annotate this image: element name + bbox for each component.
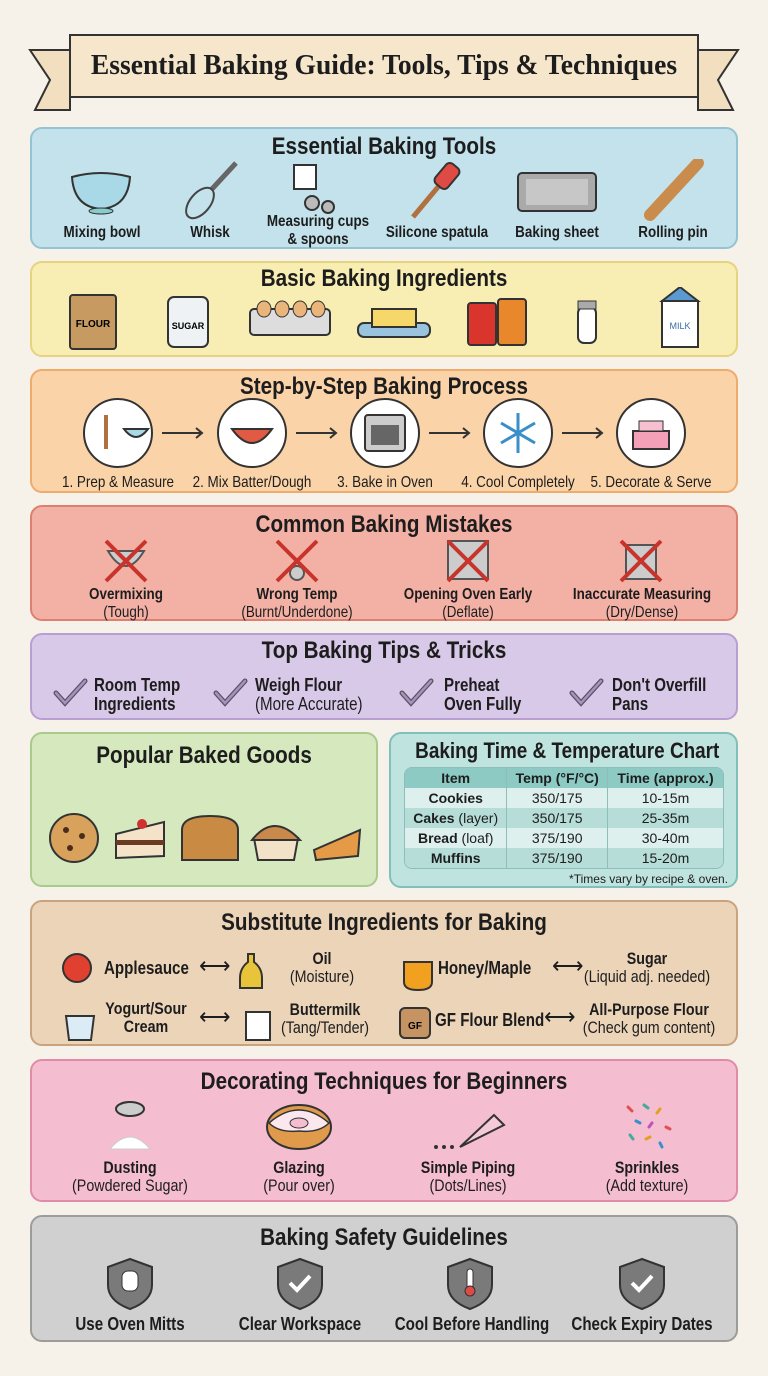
- panel: tips: Oven Fully: [444, 694, 521, 714]
- panel: substitutes: Oil: [312, 949, 332, 968]
- panel: mistakes: (Deflate): [442, 604, 494, 621]
- panel: mistakes: (Dry/Dense): [606, 604, 678, 621]
- panel: process: [30, 369, 738, 493]
- panel: substitutes: [30, 900, 738, 1046]
- icons: substitutes: [62, 953, 433, 1041]
- labels: process: 1. Prep & Measure: [62, 474, 174, 491]
- panel: substitutes: (Tang/Tender): [281, 1018, 369, 1037]
- panel: substitutes: ⟷: [199, 1004, 231, 1029]
- panel: process: 3. Bake in Oven: [337, 474, 433, 491]
- icons: crossed mistakes: [104, 540, 662, 582]
- icons: shields: [107, 1258, 665, 1310]
- icons: ingredients: [69, 287, 701, 350]
- panel: mistakes: Wrong Temp: [257, 586, 337, 603]
- icon: whisk: [185, 161, 238, 220]
- icon: bowl: [70, 172, 132, 214]
- panel: mistakes: (Burnt/Underdone): [241, 604, 353, 621]
- icon: baking sheet: [517, 172, 597, 212]
- heading: tools: Essential Baking Tools: [272, 133, 496, 160]
- table: baking times: [404, 767, 724, 869]
- tip texts: Ingredients: [94, 694, 175, 714]
- heading: substitutes: Substitute Ingredients for Baking: [221, 909, 547, 936]
- labels: decorating: (Powdered Sugar): [72, 1176, 188, 1195]
- panel: substitutes: GF Flour Blend: [435, 1010, 544, 1030]
- panel: tools: Measuring cups: [267, 213, 369, 230]
- heading: chart: Baking Time & Temperature Chart: [415, 738, 719, 763]
- panel: popular baked goods: [30, 732, 378, 887]
- icons: ingredients: MILK: [669, 321, 691, 331]
- table: baking times: 30-40m: [642, 830, 689, 846]
- panel: substitutes: ⟷: [544, 1004, 576, 1029]
- panel: tools: & spoons: [287, 231, 349, 248]
- panel: tips: [30, 633, 738, 720]
- icons: ingredients: FLOUR: [76, 319, 111, 330]
- table: baking times: Item: [441, 770, 470, 786]
- panel: substitutes: Yogurt/Sour: [105, 999, 187, 1018]
- heading: decorating: Decorating Techniques for Beginners: [201, 1068, 567, 1095]
- panel: decorating: [30, 1059, 738, 1202]
- panel: decorating: Glazing: [273, 1158, 325, 1177]
- labels: decorating: [72, 1158, 188, 1195]
- panel: safety: [30, 1215, 738, 1342]
- panel: tools: Baking sheet: [515, 224, 599, 241]
- panel: substitutes: Honey/Maple: [438, 958, 531, 978]
- tip texts: Room Temp: [94, 675, 180, 695]
- table: baking times: 375/190: [532, 830, 582, 846]
- panel: tips: Don't Overfill: [612, 675, 706, 695]
- panel: substitutes: Buttermilk: [290, 1000, 360, 1019]
- icons: decorating: [109, 1101, 672, 1150]
- panel: tips: Preheat: [444, 675, 499, 695]
- tip texts: [94, 675, 180, 714]
- heading: tips: Top Baking Tips & Tricks: [262, 637, 506, 664]
- heading: safety: Baking Safety Guidelines: [260, 1224, 508, 1251]
- panel: ingredients: [30, 261, 738, 357]
- panel: mistakes: Opening Oven Early: [404, 586, 532, 603]
- title banner: [28, 34, 740, 111]
- table: baking times: Bread (loaf): [418, 830, 493, 846]
- panel: tips: Pans: [612, 694, 648, 714]
- panel: substitutes: ⟷: [552, 953, 584, 978]
- table: baking times: 10-15m: [642, 790, 689, 806]
- table: baking times: 350/175: [532, 810, 582, 826]
- table: baking times: Cookies: [428, 790, 483, 806]
- note: *Times vary by recipe & oven.: [569, 872, 728, 886]
- panel: decorating: (Add texture): [606, 1176, 688, 1195]
- panel: decorating: Sprinkles: [615, 1158, 679, 1177]
- panel: tools: Whisk: [190, 224, 230, 241]
- panel: tips: Weigh Flour: [255, 675, 342, 695]
- panel: tools: Silicone spatula: [386, 224, 488, 241]
- panel: substitutes: (Check gum content): [583, 1018, 715, 1037]
- panel: safety: Check Expiry Dates: [571, 1314, 713, 1334]
- panel: process: 5. Decorate & Serve: [590, 474, 712, 491]
- icon: spatula: [411, 162, 460, 219]
- icon: rolling pin: [644, 159, 704, 221]
- checkmarks: [54, 678, 604, 707]
- panel: process: 4. Cool Completely: [461, 474, 575, 491]
- heading: process: Step-by-Step Baking Process: [240, 373, 528, 400]
- table: baking times: Muffins: [431, 850, 481, 866]
- panel: decorating: (Pour over): [263, 1176, 335, 1195]
- panel: tools: Rolling pin: [638, 224, 708, 241]
- panel: mistakes: Inaccurate Measuring: [573, 586, 711, 603]
- table: baking times: Temp (°F/°C): [516, 770, 599, 786]
- icons: substitutes: GF: [408, 1021, 422, 1032]
- panel: safety: Cool Before Handling: [395, 1314, 549, 1334]
- panel: substitutes: (Moisture): [290, 967, 354, 986]
- table: baking times: Cakes (layer): [413, 810, 498, 826]
- panel: substitutes: ⟷: [199, 953, 231, 978]
- labels: safety: Use Oven Mitts: [75, 1314, 185, 1334]
- heading: mistakes: Common Baking Mistakes: [256, 511, 512, 538]
- table: baking times: 25-35m: [642, 810, 689, 826]
- panel: decorating: (Dots/Lines): [430, 1176, 506, 1195]
- panel: substitutes: Cream: [124, 1017, 168, 1036]
- table: baking times: 350/175: [532, 790, 582, 806]
- panel: substitutes: All-Purpose Flour: [589, 1000, 709, 1019]
- icons: baked goods: [49, 813, 362, 863]
- icons: process steps with arrows: [83, 398, 686, 468]
- panel: tools: [30, 127, 738, 249]
- table: baking times: Time (approx.): [617, 770, 714, 786]
- heading: popular: Popular Baked Goods: [96, 742, 312, 769]
- substitute rows: Applesauce: [104, 958, 189, 978]
- table: baking times: 375/190: [532, 850, 582, 866]
- panel: mistakes: [30, 505, 738, 621]
- heading: ingredients: Basic Baking Ingredients: [261, 265, 507, 292]
- panel: substitutes: (Liquid adj. needed): [584, 967, 710, 986]
- labels: mistakes: [89, 586, 163, 621]
- panel: time & temperature chart: [389, 732, 738, 888]
- panel: decorating: Simple Piping: [421, 1158, 515, 1177]
- icon: measuring cups: [293, 164, 335, 214]
- panel: safety: Clear Workspace: [239, 1314, 361, 1334]
- table: baking times: 15-20m: [642, 850, 689, 866]
- labels: mistakes: Overmixing: [89, 586, 163, 603]
- panel: substitutes: Sugar: [627, 949, 667, 968]
- icons: ingredients: SUGAR: [172, 321, 205, 331]
- panel: tips: (More Accurate): [255, 694, 363, 714]
- labels: mistakes: (Tough): [103, 604, 149, 621]
- panel: process: 2. Mix Batter/Dough: [193, 474, 311, 491]
- labels: decorating: Dusting: [103, 1158, 157, 1177]
- title banner: Essential Baking Guide: Tools, Tips & Techniques: [91, 49, 677, 81]
- label: tools: Mixing bowl: [64, 224, 140, 241]
